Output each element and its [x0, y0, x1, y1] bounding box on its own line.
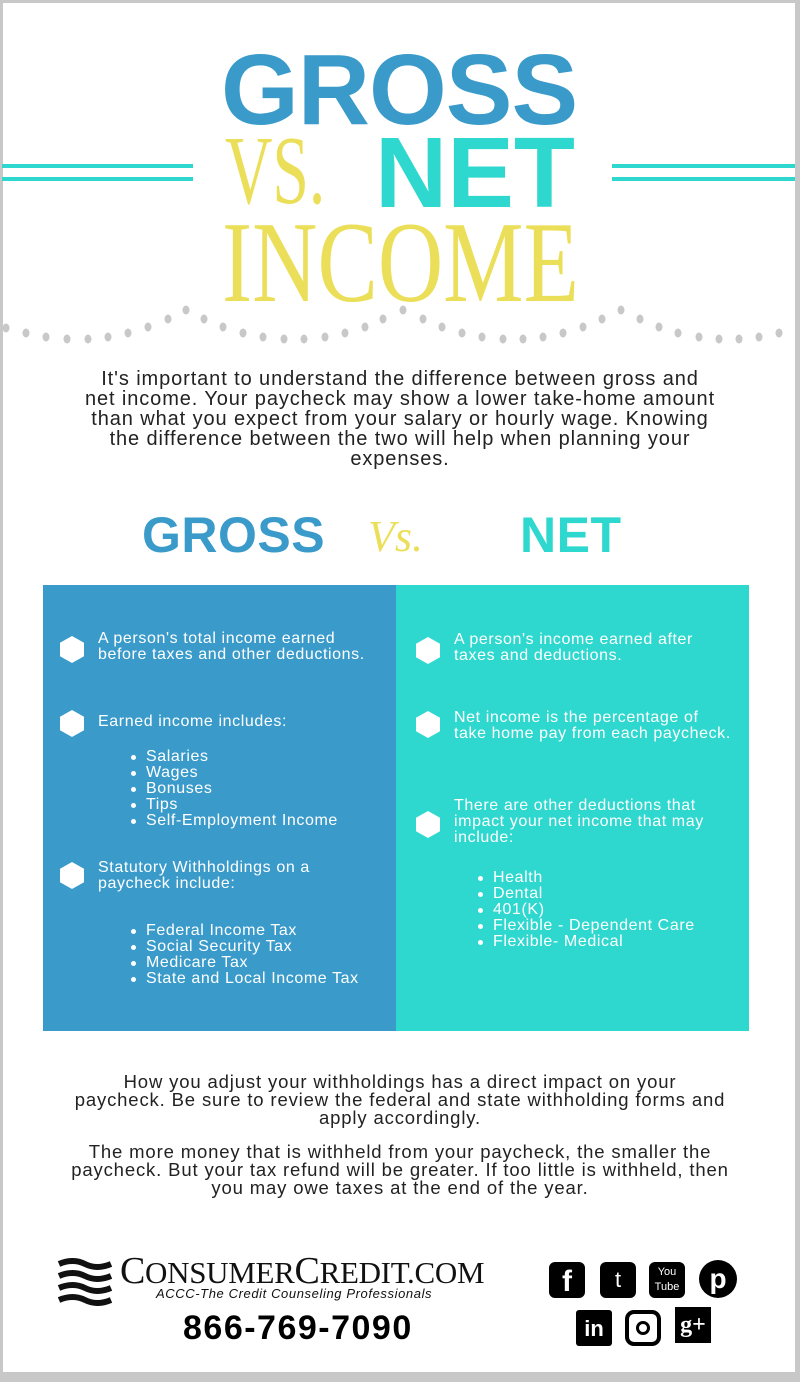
panel: gross: Medicare Tax — [146, 954, 248, 971]
panel: gross: before taxes and other deductions. — [98, 646, 365, 663]
panel: gross: Wages — [146, 764, 198, 781]
logo text: CONSUMERCREDIT.COM — [120, 1250, 484, 1292]
intro text: the difference between the two will help when planning your — [110, 428, 690, 450]
social icons: t — [615, 1267, 621, 1292]
closing text: The more money that is withheld from your paycheck, the smaller the — [89, 1141, 711, 1162]
panel: gross: Earned income includes: — [98, 713, 287, 730]
panel: gross: Bonuses — [146, 780, 212, 797]
social icons — [549, 1260, 737, 1346]
panel: net: take home pay from each paycheck. — [454, 725, 731, 742]
panel: gross: Social Security Tax — [146, 938, 292, 955]
panel: net: 401(K) — [493, 901, 545, 918]
panel: gross: Self-Employment Income — [146, 812, 338, 829]
panel: gross — [43, 585, 396, 1031]
social icons: You — [658, 1266, 676, 1278]
panel: net: Flexible- Medical — [493, 933, 623, 950]
panel: net: Health — [493, 869, 543, 886]
phone: 866-769-7090 — [183, 1309, 413, 1347]
logo icon: waves — [58, 1258, 112, 1306]
closing text — [71, 1071, 729, 1198]
panel: gross: Statutory Withholdings on a — [98, 859, 310, 876]
panel: net: Flexible - Dependent Care — [493, 917, 695, 934]
social icons: p — [709, 1263, 727, 1294]
panel: net: impact your net income that may — [454, 813, 704, 830]
title: GROSS: GROSS — [221, 34, 577, 146]
intro text — [85, 368, 715, 470]
closing text: How you adjust your withholdings has a direct impact on your — [124, 1071, 676, 1092]
panel: gross: Federal Income Tax — [146, 922, 297, 939]
social icons: g+ — [680, 1312, 706, 1338]
social icons: Tube — [655, 1281, 679, 1293]
panel: net: taxes and deductions. — [454, 647, 622, 664]
closing text: paycheck. Be sure to review the federal and state withholding forms and — [75, 1089, 725, 1110]
title: NET: NET — [375, 117, 575, 229]
panel: gross: Salaries — [146, 748, 209, 765]
intro text: than what you expect from your salary or hourly wage. Knowing — [91, 408, 709, 430]
social icons: in — [584, 1316, 604, 1341]
intro text: net income. Your paycheck may show a lower take-home amount — [85, 388, 715, 410]
panel: gross: Tips — [146, 796, 178, 813]
subheading GROSS vs NET — [142, 507, 622, 563]
panel: gross: paycheck include: — [98, 875, 235, 892]
footer: ACCC-The Credit Counseling Professionals — [156, 1286, 432, 1301]
title — [221, 34, 579, 327]
panel: net: There are other deductions that — [454, 797, 696, 814]
closing text: you may owe taxes at the end of the year. — [211, 1177, 589, 1198]
intro text: expenses. — [350, 448, 450, 470]
panel: net: Dental — [493, 885, 543, 902]
subheading GROSS vs NET: Vs. — [368, 512, 423, 561]
closing text: paycheck. But your tax refund will be greater. If too little is withheld, then — [71, 1159, 729, 1180]
panel: net — [396, 585, 749, 1031]
panel: gross: State and Local Income Tax — [146, 970, 359, 987]
closing text: apply accordingly. — [319, 1107, 481, 1128]
panel: gross: A person's total income earned — [98, 630, 335, 647]
panel: net: Net income is the percentage of — [454, 709, 699, 726]
title: INCOME: INCOME — [222, 199, 579, 327]
subheading GROSS vs NET: NET — [520, 507, 622, 563]
intro text: It's important to understand the difference between gross and — [101, 368, 699, 390]
social icons: f — [562, 1265, 572, 1298]
subheading GROSS vs NET: GROSS — [142, 507, 325, 563]
footer — [3, 1240, 795, 1372]
title: VS.: VS. — [225, 117, 325, 225]
panel: net: A person's income earned after — [454, 631, 693, 648]
dotted wave — [3, 306, 782, 344]
decorative lines — [2, 164, 193, 168]
panel: net: include: — [454, 829, 514, 846]
